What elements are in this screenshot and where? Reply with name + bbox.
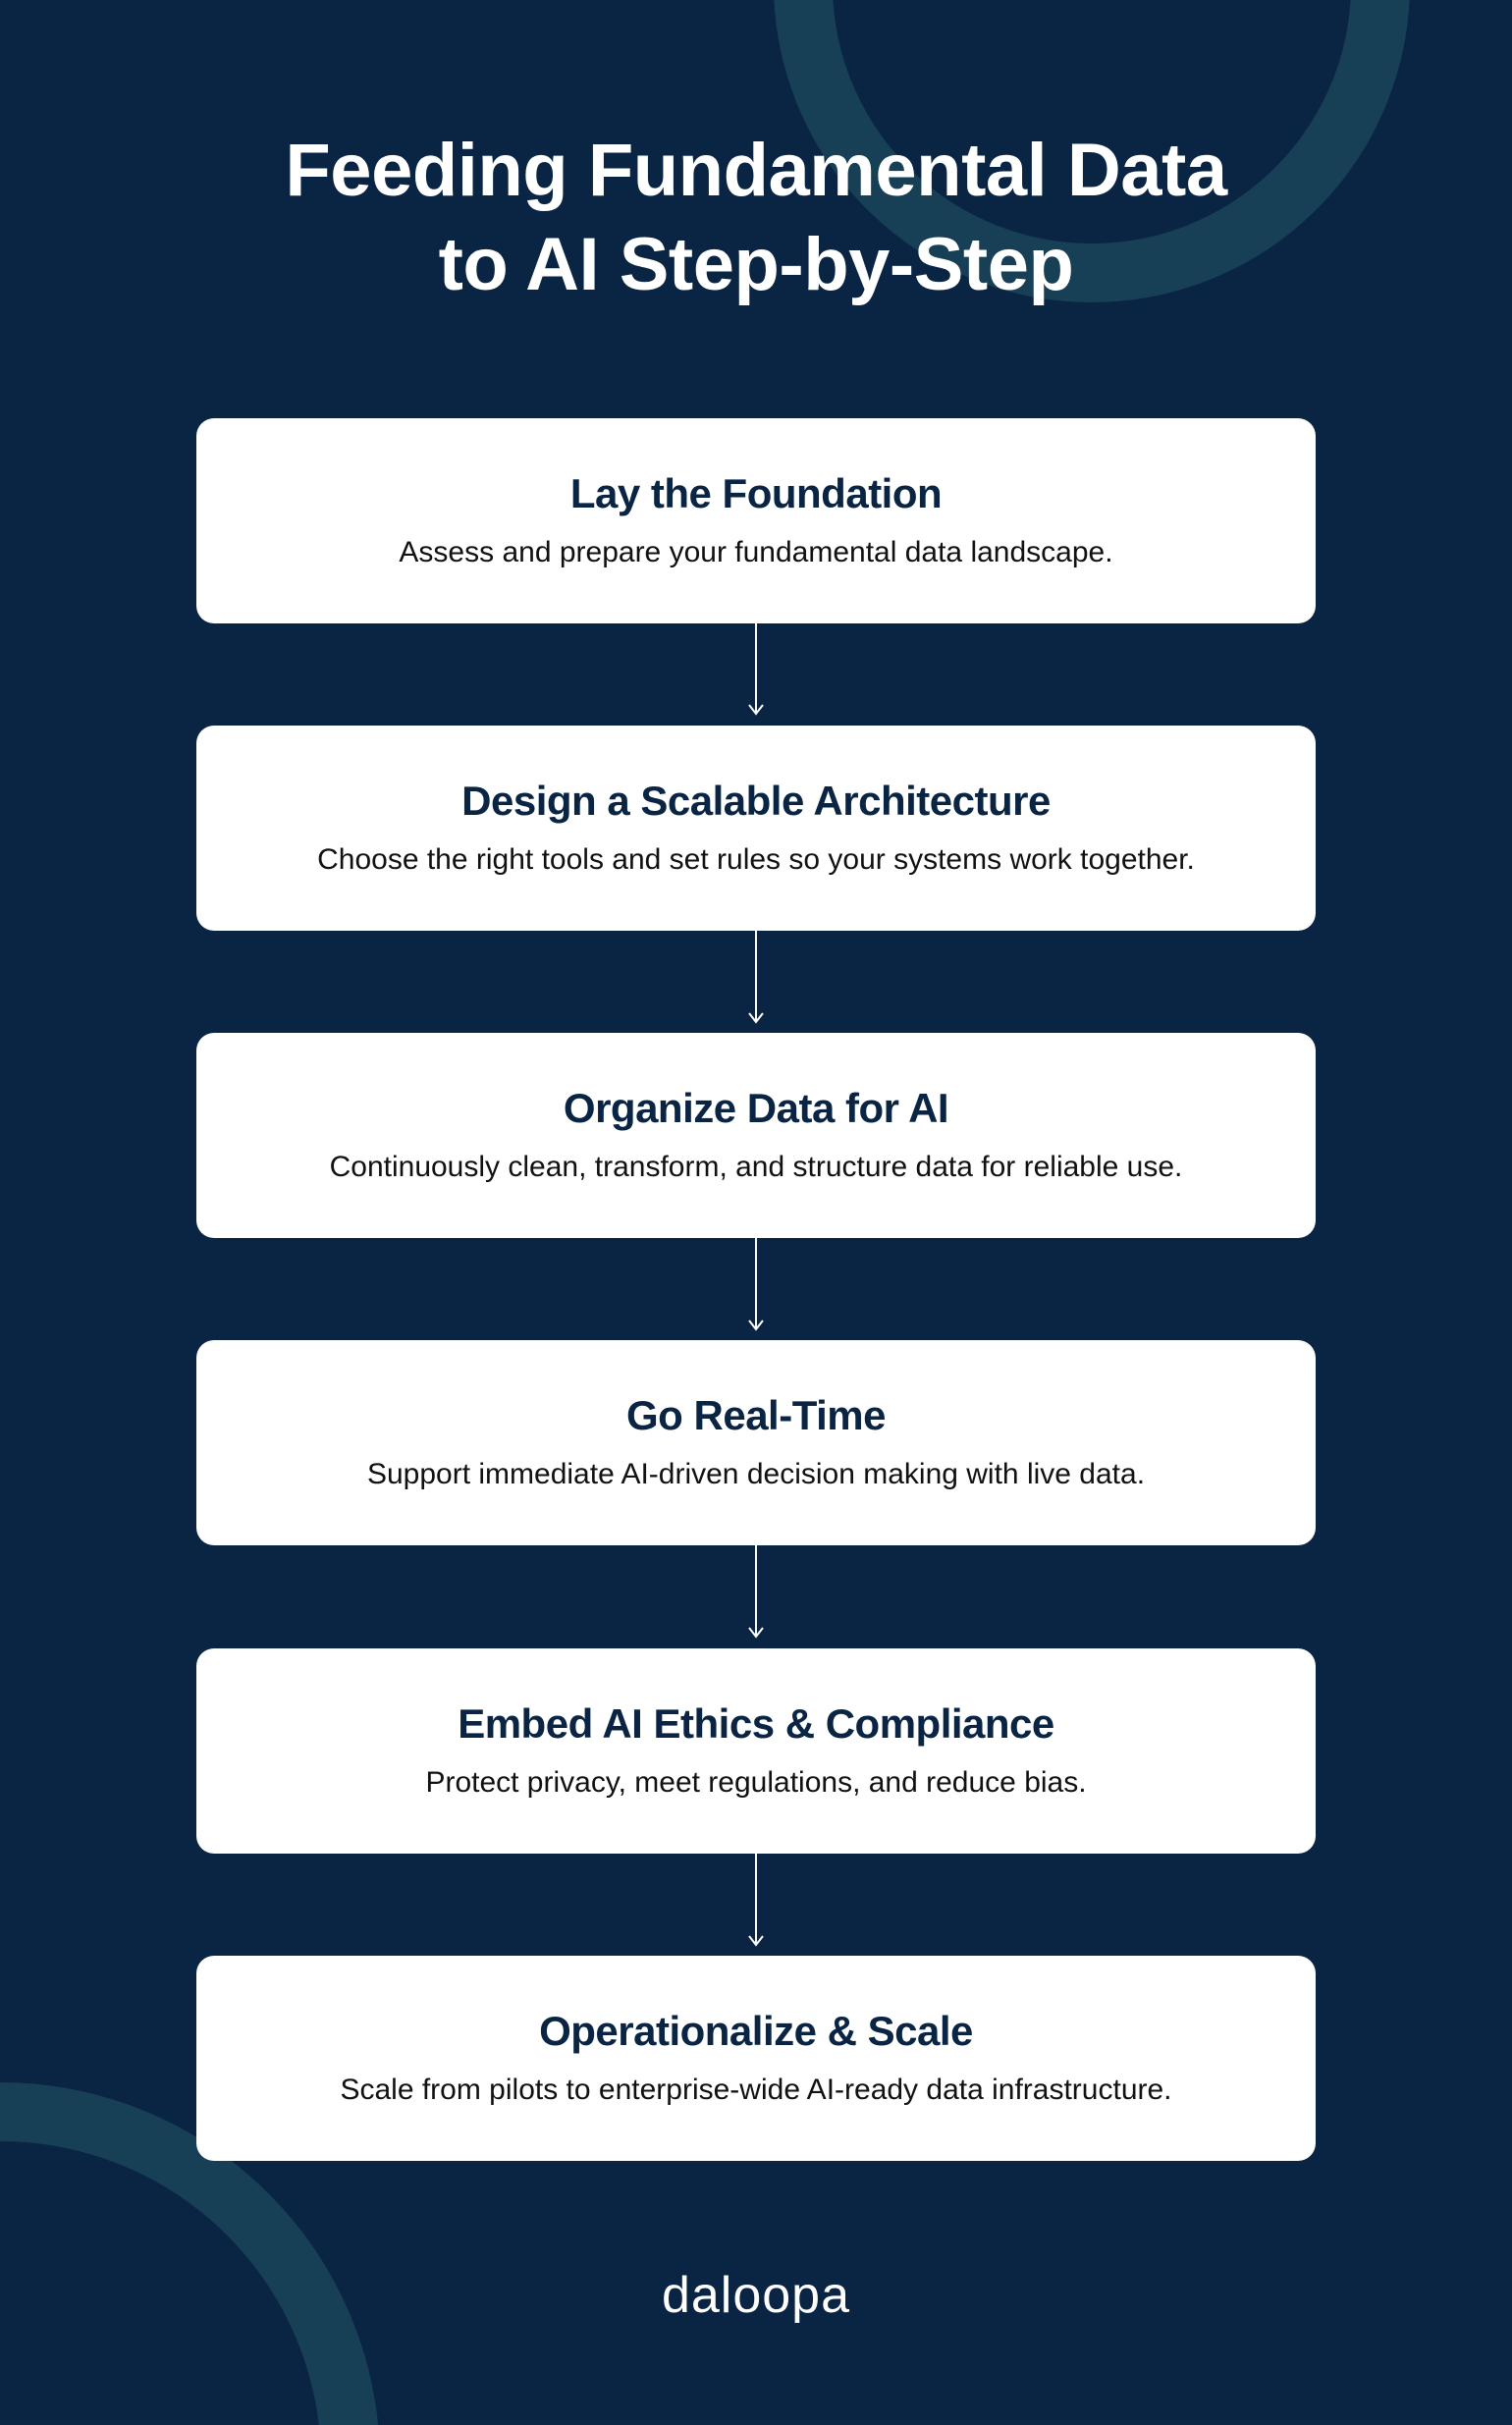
arrow 3 [748,1238,764,1331]
card 1: Lay the Foundation [570,470,942,516]
arrow 1 [748,623,764,715]
title [285,129,1228,306]
arrow 4 [748,1545,764,1638]
card 3: Continuously clean, transform, and structure data for reliable use. [330,1151,1182,1183]
card 5: Protect privacy, meet regulations, and reduce bias. [425,1766,1087,1799]
card 3: Organize Data for AI [564,1085,948,1131]
card 4: Support immediate AI-driven decision making with live data. [367,1458,1145,1490]
card 4 [196,1340,1316,1545]
card 6: Scale from pilots to enterprise-wide AI-ready data infrastructure. [340,2074,1172,2106]
card 6: Operationalize & Scale [539,2008,973,2054]
logo: daloopa [662,2267,850,2324]
card 2: Choose the right tools and set rules so your systems work together. [317,843,1195,876]
card 2 [196,726,1316,931]
title: to AI Step-by-Step [439,223,1073,306]
title: Feeding Fundamental Data [285,129,1227,212]
arrow 2 [748,931,764,1023]
card 2: Design a Scalable Architecture [461,778,1051,824]
card 5: Embed AI Ethics & Compliance [458,1700,1054,1747]
card 1 [196,418,1316,623]
card 3 [196,1033,1316,1238]
card 5 [196,1648,1316,1854]
card 4: Go Real-Time [626,1392,886,1438]
card 1: Assess and prepare your fundamental data landscape. [399,536,1113,568]
card 6 [196,1956,1316,2161]
arrow 5 [748,1854,764,1946]
